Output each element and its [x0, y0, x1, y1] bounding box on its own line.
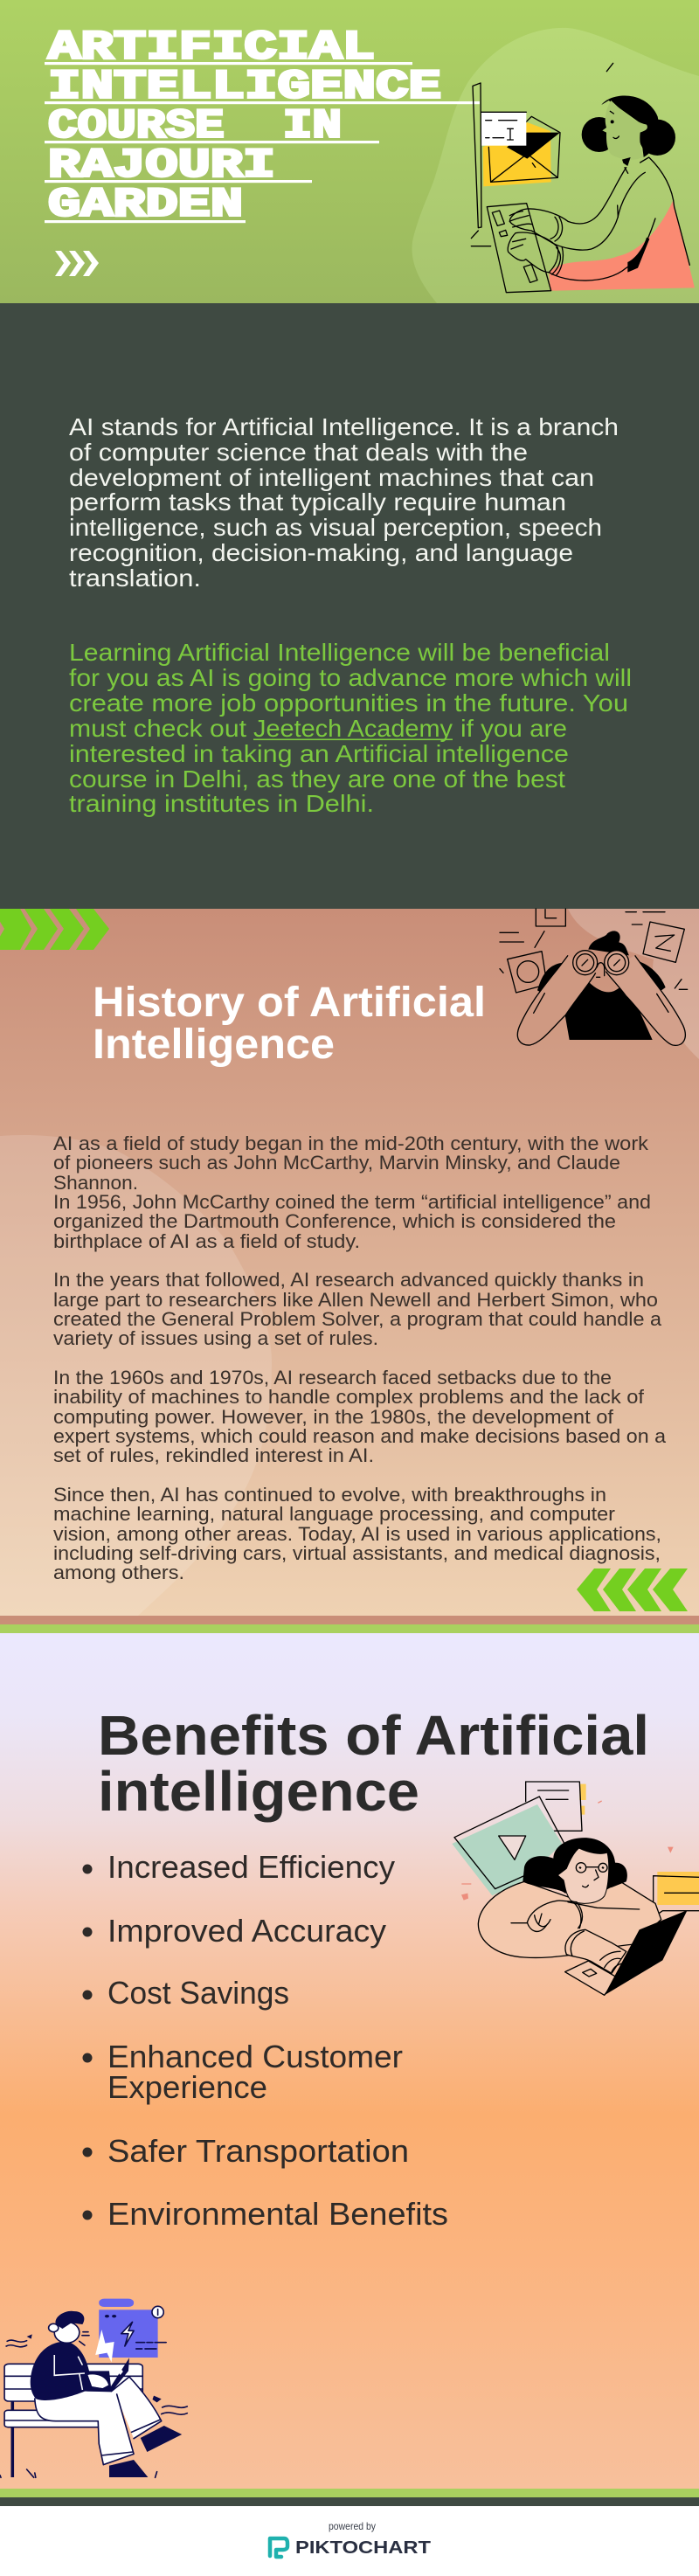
illustration: woman typing at computer — [471, 63, 695, 293]
text block: what AI is: translation. — [69, 564, 201, 592]
illustration: man on bench with laptop — [0, 2299, 187, 2477]
footer bands — [0, 2489, 699, 2506]
text block: why learn AI: Jeetech Academy — [253, 715, 453, 742]
illustration: woman with laptop — [452, 1782, 699, 1995]
text block: why learn AI: interested in taking an Artificial intelligence — [69, 740, 569, 767]
text block: why learn AI: if you are — [460, 715, 567, 742]
title: INTELLIGENCE — [48, 65, 441, 110]
text block: history body: In 1956, John McCarthy coined the term “artificial intelligence” and — [53, 1191, 651, 1213]
text block: history body: including self-driving cars, virtual assistants, and medical diagnosis, — [53, 1542, 661, 1564]
text block: history body: AI as a field of study began in the mid-20th century, with the work — [53, 1132, 649, 1154]
text block: why learn AI: for you as AI is going to advance more which will — [69, 664, 632, 691]
icon: green chevrons bottom — [577, 1568, 688, 1611]
list: benefits: Cost Savings — [107, 1975, 289, 2011]
heading: benefits: Benefits of Artificial — [98, 1704, 649, 1767]
title: RAJOURI — [48, 143, 275, 189]
divider bands — [0, 1616, 699, 1633]
text block: what AI is — [69, 413, 619, 592]
list: benefits: Enhanced Customer — [107, 2039, 403, 2074]
text block: history body: set of rules, rekindled interest in AI. — [53, 1444, 374, 1466]
text block: history body: variety of issues using a set of rules. — [53, 1327, 378, 1349]
text block: history body: In the years that followed, AI research advanced quickly thanks in — [53, 1269, 644, 1291]
text block: history body: birthplace of AI as a field of study. — [53, 1230, 360, 1252]
text block: why learn AI: create more job opportunities in the future. You — [69, 689, 628, 717]
text block: history body: created the General Problem Solver, a program that could handle a — [53, 1308, 662, 1330]
list: benefits: Safer Transportation — [107, 2133, 409, 2169]
icon: green chevrons top — [0, 909, 109, 950]
text block: what AI is: of computer science that deals with the — [69, 439, 528, 466]
footer: Piktochart logo: PIKTOCHART — [295, 2538, 431, 2558]
list: benefits: Improved Accuracy — [107, 1913, 386, 1949]
title — [45, 24, 480, 227]
text block: what AI is: recognition, decision-making, and language — [69, 539, 573, 566]
text block: history body: inability of machines to handle complex problems and the lack of — [53, 1386, 645, 1408]
text block: history body: expert systems, which could reason and make decisions based on a — [53, 1425, 667, 1447]
text block: history body: Since then, AI has continued to evolve, with breakthroughs in — [53, 1484, 606, 1506]
text block: history body: computing power. However, in the 1980s, the development of — [53, 1406, 614, 1428]
footer: Piktochart logo — [270, 2520, 431, 2558]
heading: history — [93, 980, 486, 1068]
text block: why learn AI: Learning Artificial Intelligence will be beneficial — [69, 639, 610, 666]
text block: why learn AI: course in Delhi, as they are one of the best — [69, 765, 565, 793]
list: benefits: Environmental Benefits — [107, 2196, 448, 2232]
heading: benefits: intelligence — [98, 1760, 419, 1823]
icon: white chevrons — [55, 251, 99, 276]
heading: benefits — [98, 1704, 649, 1823]
panel: benefits of AI — [0, 1633, 699, 2489]
text block: what AI is: perform tasks that typically require human — [69, 488, 566, 516]
text block: history body — [53, 1132, 667, 1583]
text block: history body: vision, among other areas. Today, AI is used in various applications, — [53, 1523, 661, 1545]
heading: history: History of Artificial — [93, 980, 486, 1026]
text block: why learn AI: training institutes in Delhi. — [69, 790, 374, 817]
list: benefits: Increased Efficiency — [107, 1849, 395, 1885]
list: benefits: Experience — [107, 2069, 267, 2105]
panel: history of AI — [0, 909, 699, 1616]
illustration: person with binoculars — [500, 909, 688, 1045]
icon: Piktochart mark — [270, 2538, 287, 2557]
text block: history body: large part to researchers like Allen Newell and Herbert Simon, who — [53, 1289, 658, 1311]
text block: history body: among others. — [53, 1562, 184, 1583]
text block: what AI is: intelligence, such as visual perception, speech — [69, 514, 602, 541]
footer: Piktochart logo: powered by — [329, 2520, 376, 2532]
title: GARDEN — [48, 182, 243, 227]
title: ARTIFICIAL — [48, 24, 375, 70]
heading: history: Intelligence — [93, 1021, 335, 1068]
title: COURSE IN — [48, 103, 342, 149]
text block: why learn AI: must check out — [69, 715, 246, 742]
text block: history body: machine learning, natural language processing, and computer — [53, 1503, 615, 1525]
text block: history body: In the 1960s and 1970s, AI research faced setbacks due to the — [53, 1367, 612, 1388]
text block: why learn AI — [69, 639, 632, 817]
text block: history body: of pioneers such as John McCarthy, Marvin Minsky, and Claude — [53, 1152, 620, 1174]
list: benefits — [82, 1849, 448, 2232]
text block: history body: Shannon. — [53, 1172, 138, 1194]
panel: introduction — [0, 303, 699, 909]
panel: header — [0, 0, 699, 303]
text block: history body: organized the Dartmouth Conference, which is considered the — [53, 1210, 616, 1232]
text block: what AI is: development of intelligent machines that can — [69, 464, 594, 491]
text block: what AI is: AI stands for Artificial Intelligence. It is a branch — [69, 413, 619, 440]
